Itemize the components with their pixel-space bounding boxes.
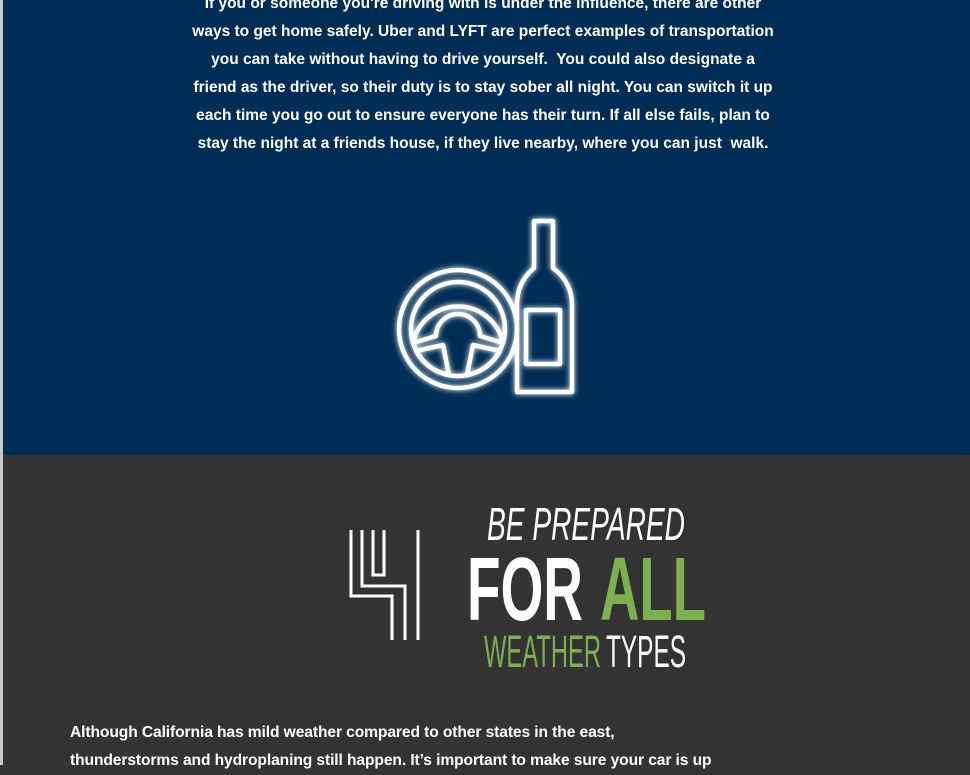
- heading text: WEATHER: [484, 626, 601, 677]
- text block: alternate transport: friend as the driver, so their duty is to stay sober all night. You can switch it up: [193, 79, 773, 96]
- text block: california weather: Although California has mild weather compared to other states in the east,: [70, 724, 615, 741]
- text block: alternate transport: you can take without having to drive yourself. You could also designate a: [211, 51, 755, 68]
- text block: alternate transport: ways to get home safely. Uber and LYFT are perfect examples of transportation: [192, 23, 774, 40]
- text block: alternate transport: each time you go out to ensure everyone has their turn. If all else fails, plan to: [196, 107, 770, 124]
- heading text: [467, 498, 706, 677]
- panel: transportation (blue): [3, 0, 970, 455]
- icon: number 4: [351, 530, 418, 640]
- heading text: BE PREPARED: [487, 498, 685, 550]
- text block: alternate transport: [192, 0, 774, 152]
- heading text: TYPES: [606, 626, 686, 677]
- text block: alternate transport: stay the night at a friends house, if they live nearby, where you can just walk.: [198, 135, 768, 152]
- heading text: ALL: [600, 540, 706, 640]
- text block: california weather: [70, 724, 711, 769]
- text block: california weather: thunderstorms and hydroplaning still happen. It’s important to make sure your car is up: [70, 752, 711, 769]
- heading text: FOR: [467, 540, 583, 640]
- panel: weather (dark): [3, 455, 970, 765]
